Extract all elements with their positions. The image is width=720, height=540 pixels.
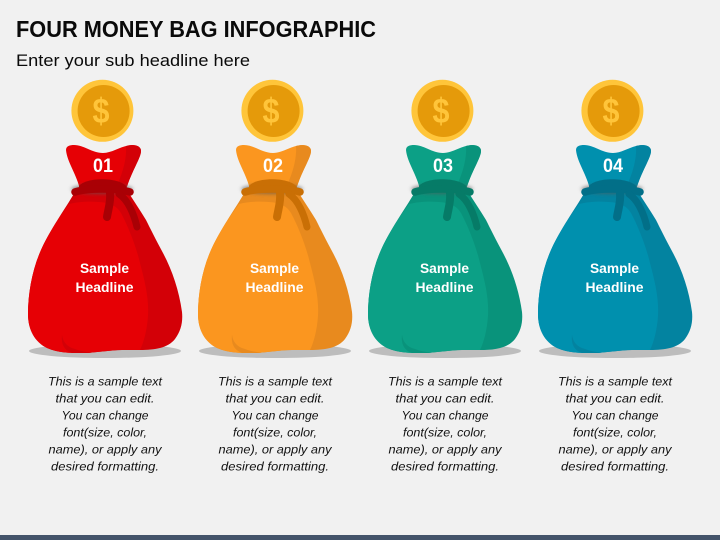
text block 01: desired formatting. [51,460,159,474]
text block 03: desired formatting. [391,460,499,474]
panel: money bag 02 [198,80,352,474]
text block 03 [388,374,503,474]
text block 02: font(size, color, [233,426,317,440]
text block 03: This is a sample text [388,374,503,388]
text block 04: This is a sample text [558,374,673,388]
bag headline 02: Sample [250,260,299,276]
text block 02: that you can edit. [226,392,324,406]
panel: money bag 04 [538,80,692,474]
text block 04: name), or apply any [558,442,672,456]
text block 01: name), or apply any [48,442,162,456]
bag headline 04: Sample [590,260,639,276]
panel: money bag 01 [28,80,182,474]
icon: red bag 01 [28,145,182,358]
icon: coin 04 [581,80,643,142]
bag headline 01: Headline [76,279,134,295]
bag headline 03 [416,260,474,295]
panel: money bag 03 [368,80,522,474]
bag headline 01: Sample [80,260,129,276]
text block 02 [218,374,333,474]
icon: coin 04: $ [602,92,620,131]
icon: coin 03: $ [432,92,450,131]
icon: coin 02 [241,80,303,142]
number 01: 01 [93,156,113,177]
text block 04: desired formatting. [561,460,669,474]
bag headline 03: Sample [420,260,469,276]
text block 04: font(size, color, [573,426,657,440]
text block 02: You can change [232,408,319,422]
text block 01 [48,374,163,474]
icon: orange bag 02 [198,145,352,358]
number 04: 04 [603,156,623,177]
icon: coin 03 [411,80,473,142]
text block 04: that you can edit. [566,392,664,406]
number 03: 03 [433,156,453,177]
bag headline 04 [586,260,644,295]
icon: coin 02: $ [262,92,280,131]
text block 03: name), or apply any [388,442,502,456]
icon: blue bag 04 [538,145,692,358]
bag headline 02: Headline [246,279,304,295]
icon: coin 01 [71,80,133,142]
bag headline 03: Headline [416,279,474,295]
bag headline 04: Headline [586,279,644,295]
text block 03: font(size, color, [403,426,487,440]
icon: teal bag 03 [368,145,522,358]
text block 02: desired formatting. [221,460,329,474]
bag headline 01 [76,260,134,295]
text block 01: that you can edit. [56,392,154,406]
footer bar [0,535,720,540]
text block 01: This is a sample text [48,374,163,388]
subtitle: Enter your sub headline here [16,51,250,70]
text block 04 [558,374,673,474]
bag headline 02 [246,260,304,295]
icon: coin 01: $ [92,92,110,131]
number 02: 02 [263,156,283,177]
text block 04: You can change [572,408,659,422]
text block 03: You can change [402,408,489,422]
title: FOUR MONEY BAG INFOGRAPHIC [16,16,376,42]
text block 01: font(size, color, [63,426,147,440]
text block 02: This is a sample text [218,374,333,388]
text block 03: that you can edit. [396,392,494,406]
text block 02: name), or apply any [218,442,332,456]
text block 01: You can change [62,408,149,422]
